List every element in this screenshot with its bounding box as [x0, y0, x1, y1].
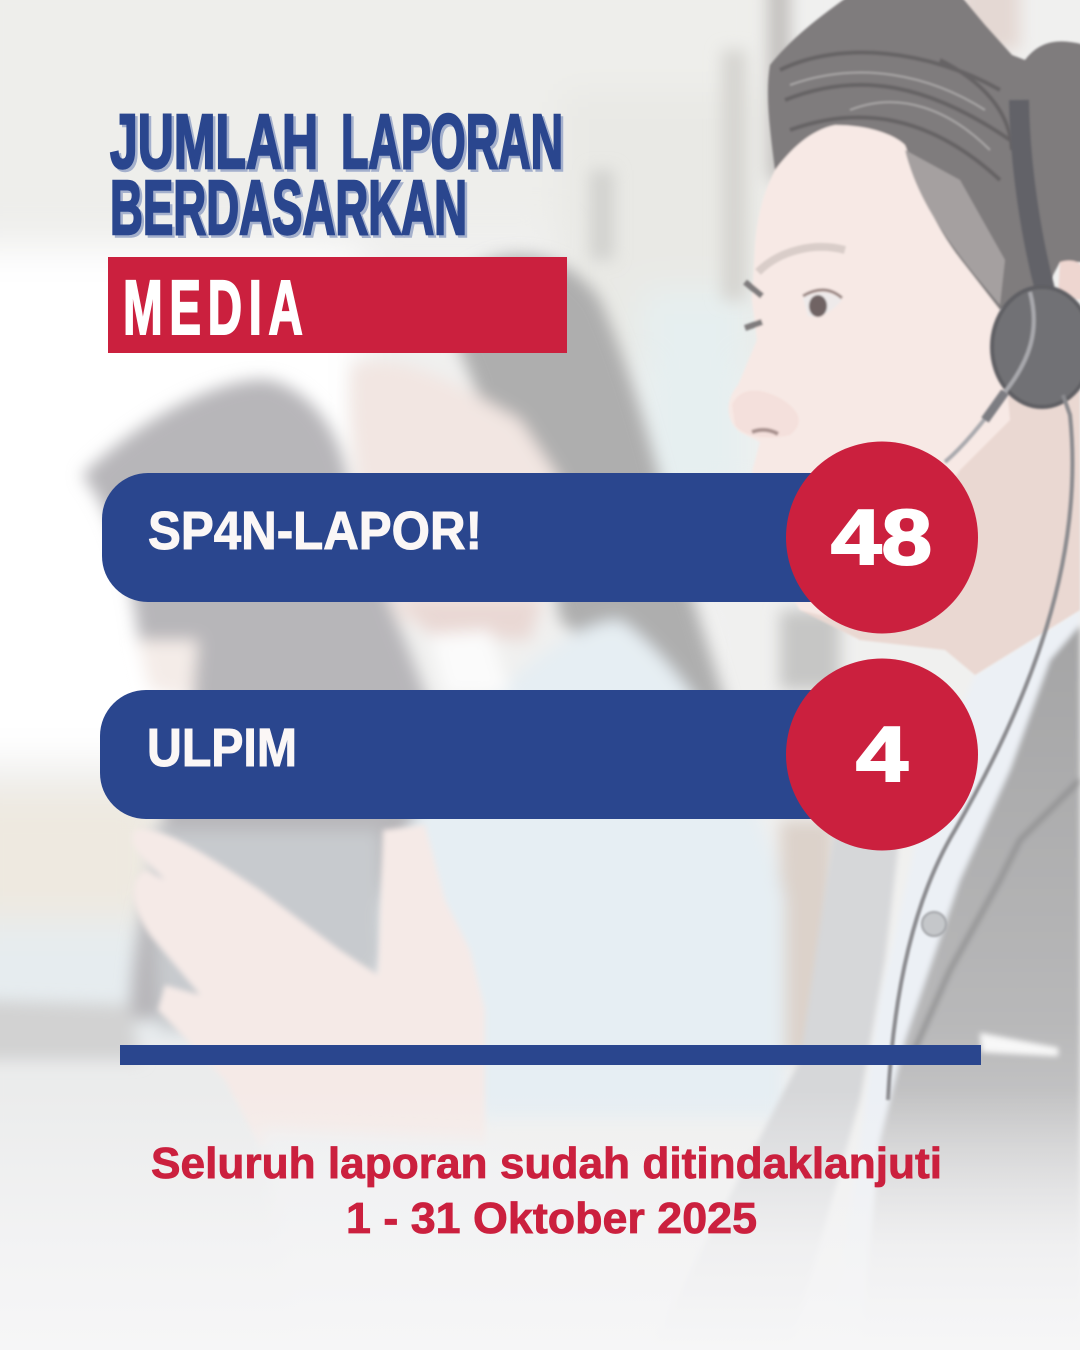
title: BERDASARKAN — [112, 168, 470, 254]
title: BERDASARKAN — [110, 165, 467, 251]
footer note — [151, 1139, 942, 1243]
category banner: media: MEDIA — [123, 264, 309, 351]
row: SP4N-LAPOR! 48: 48 — [831, 493, 932, 581]
divider bar — [120, 1045, 981, 1065]
man: headset — [888, 100, 1080, 1100]
hair — [768, 0, 1080, 310]
footer note: 1 - 31 Oktober 2025 — [346, 1194, 757, 1243]
row: ULPIM 4: 4 — [856, 710, 908, 798]
second agent hair — [440, 255, 735, 740]
row: ULPIM 4: ULPIM — [147, 718, 297, 778]
office backdrop — [0, 0, 780, 1350]
row: ULPIM 4 — [100, 658, 978, 850]
hand — [132, 825, 485, 1146]
man: neck and face — [728, 0, 1080, 675]
man: jacket and shirt — [650, 610, 1080, 1350]
second agent face — [351, 361, 560, 640]
category banner: media — [108, 257, 567, 353]
title: LAPORAN — [344, 102, 566, 188]
second agent shirt — [385, 620, 785, 1120]
title: JUMLAH — [110, 99, 318, 185]
footer note: Seluruh laporan sudah ditindaklanjuti — [151, 1139, 942, 1188]
first agent hijab — [82, 380, 440, 1020]
lower desk area — [260, 1130, 640, 1350]
title: LAPORAN — [341, 99, 563, 185]
title: JUMLAH — [112, 102, 320, 188]
row: SP4N-LAPOR! 48 — [102, 442, 978, 634]
title — [110, 99, 566, 254]
ear — [1058, 261, 1080, 300]
row: SP4N-LAPOR! 48: SP4N-LAPOR! — [148, 501, 482, 561]
